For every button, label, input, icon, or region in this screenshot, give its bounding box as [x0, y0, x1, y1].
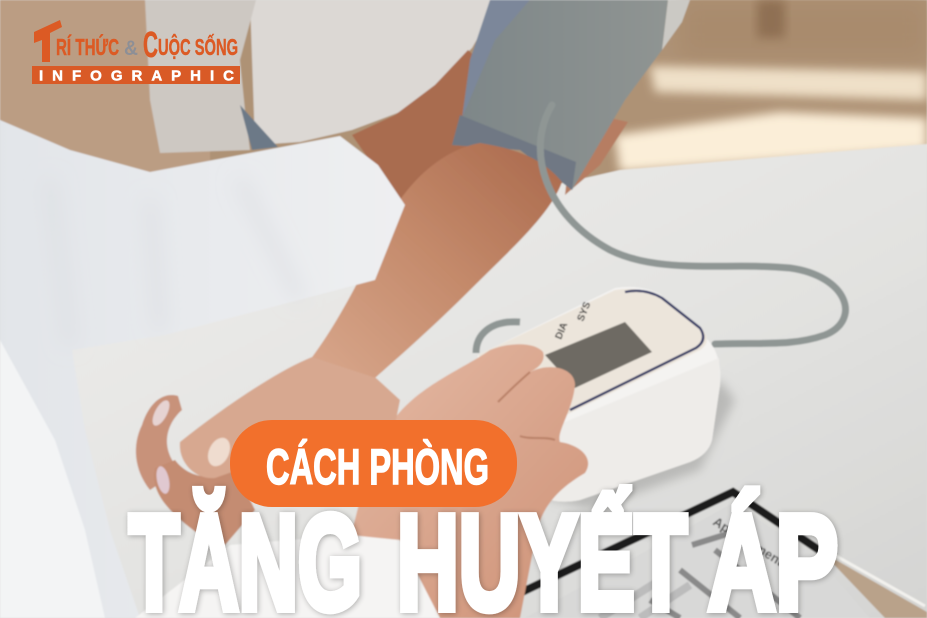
monitor labels: SYS: [576, 300, 593, 323]
table: [0, 144, 927, 618]
doctor's white coat sleeve: [0, 120, 405, 618]
blood pressure monitor: [470, 287, 735, 510]
patient's hand: [136, 357, 400, 545]
patient's upper arm: [352, 50, 500, 205]
logo wordmark: UỘC SỐNG: [158, 33, 238, 60]
logo wordmark: [56, 24, 238, 65]
logo: Tri Thuc & Cuoc Song Infographic: &: [124, 37, 138, 60]
appointment clipboard: [520, 492, 927, 618]
clipboard form text: Appointment: [710, 514, 787, 569]
doctor's lower coat: [135, 535, 440, 618]
logo infographic bar: [32, 66, 240, 84]
logo wordmark: C: [143, 24, 158, 65]
monitor display: [545, 322, 652, 388]
fingernails: [149, 398, 173, 428]
subtitle pill: [230, 420, 517, 507]
patient's shirt: [145, 0, 500, 153]
doctor's hand on monitor: [330, 344, 588, 618]
blood pressure cuff: [452, 0, 690, 190]
logo emblem T: [34, 20, 62, 62]
blood pressure tube: [540, 105, 845, 344]
logo: Tri Thuc & Cuoc Song Infographic: INFOGRAPHIC: [39, 68, 234, 84]
title: [129, 487, 838, 618]
blood pressure monitor: DIA: [554, 321, 570, 341]
patient's forearm: [310, 143, 562, 378]
logo wordmark: RÍ THỨC: [56, 33, 119, 60]
room background: [0, 0, 927, 220]
patient's far hand behind cuff: [565, 118, 628, 195]
logo: Tri Thuc & Cuoc Song Infographic: [32, 20, 240, 84]
subtitle pill: CÁCH PHÒNG: [266, 439, 489, 495]
